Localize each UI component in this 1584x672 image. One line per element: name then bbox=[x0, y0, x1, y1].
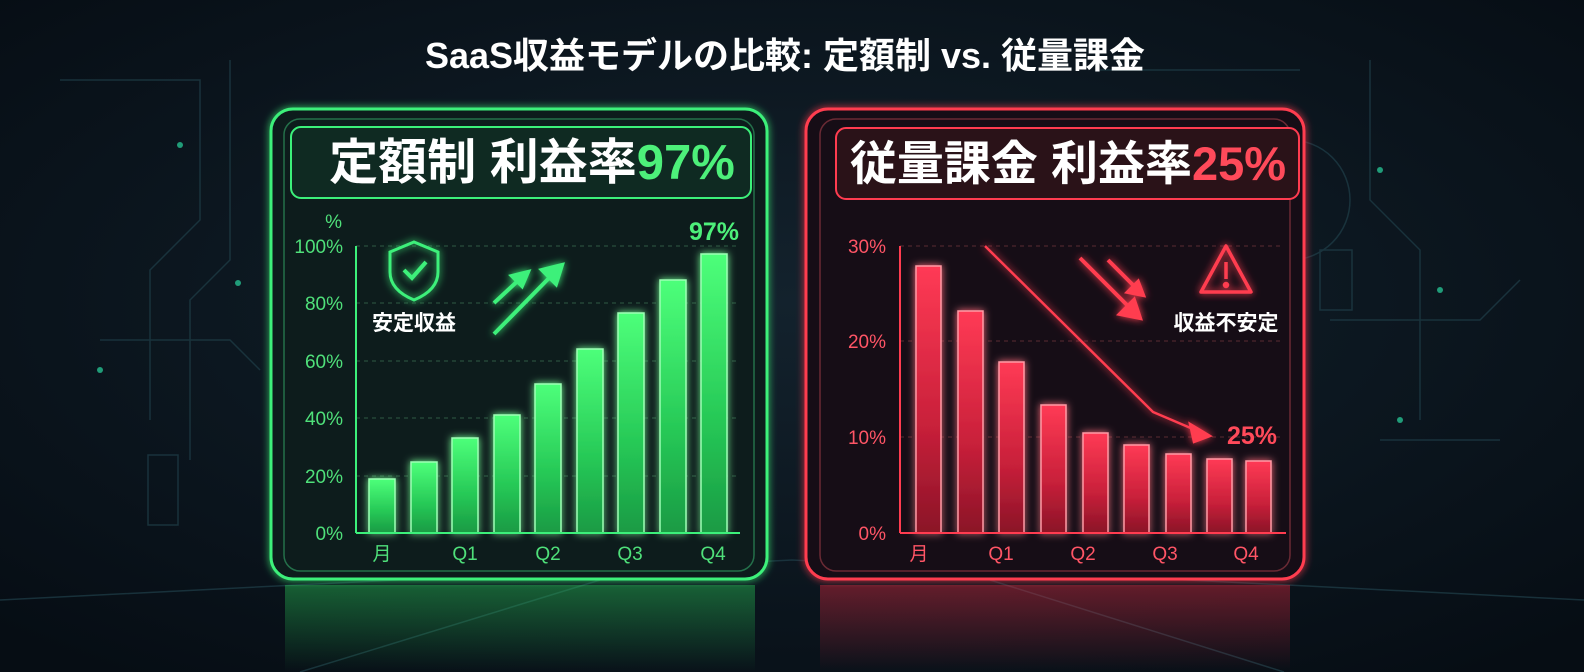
bar chart: usage-based: 10% bbox=[848, 428, 886, 449]
bar chart: usage-based: 20% bbox=[848, 332, 886, 353]
bar chart: fixed-rate: 月 bbox=[372, 544, 392, 565]
bar chart: usage-based: 月 bbox=[909, 544, 929, 565]
bar chart: fixed-rate: 80% bbox=[305, 294, 343, 315]
bar chart: fixed-rate: 40% bbox=[305, 409, 343, 430]
reflections bbox=[285, 585, 1290, 672]
heading box: fixed-rate: 定額制 利益率97% bbox=[329, 136, 735, 190]
bar chart: usage-based: Q3 bbox=[1152, 544, 1178, 565]
panel: usage-based bbox=[806, 109, 1304, 579]
icon: shield bbox=[390, 242, 438, 300]
heading box: fixed-rate bbox=[291, 127, 751, 198]
icon: up arrows bbox=[494, 265, 562, 334]
bar chart: usage-based: 25% bbox=[1227, 422, 1277, 450]
bar chart: usage-based: 30% bbox=[848, 237, 886, 258]
arrow: declining trend bbox=[985, 246, 1210, 442]
icon: down arrows bbox=[1080, 258, 1143, 318]
bar chart: fixed-rate: 60% bbox=[305, 352, 343, 373]
bar chart: fixed-rate: Q4 bbox=[700, 544, 726, 565]
bar chart: fixed-rate: 0% bbox=[316, 524, 343, 545]
bar chart: fixed-rate: Q3 bbox=[617, 544, 643, 565]
bar chart: usage-based: 0% bbox=[859, 524, 886, 545]
bar chart: usage-based bbox=[848, 237, 1286, 565]
bar chart: fixed-rate bbox=[294, 212, 740, 565]
label: unstable revenue: 収益不安定 bbox=[1174, 312, 1278, 335]
icon: warning bbox=[1201, 246, 1251, 292]
bar chart: usage-based: Q4 bbox=[1233, 544, 1259, 565]
panel: fixed-rate bbox=[271, 109, 767, 579]
bar chart: usage-based: Q2 bbox=[1070, 544, 1096, 565]
bar chart: fixed-rate: 100% bbox=[294, 237, 343, 258]
bar chart: fixed-rate: Q2 bbox=[535, 544, 561, 565]
label: stable revenue: 安定収益 bbox=[372, 312, 456, 335]
title: SaaS収益モデルの比較: 定額制 vs. 従量課金 bbox=[425, 35, 1145, 76]
bar chart: fixed-rate: 20% bbox=[305, 467, 343, 488]
bar chart: usage-based: Q1 bbox=[988, 544, 1014, 565]
bar chart: fixed-rate: % bbox=[325, 212, 342, 233]
heading box: usage-based: 従量課金 利益率25% bbox=[850, 137, 1286, 190]
bar chart: fixed-rate: Q1 bbox=[452, 544, 478, 565]
bar chart: fixed-rate: 97% bbox=[689, 218, 739, 246]
